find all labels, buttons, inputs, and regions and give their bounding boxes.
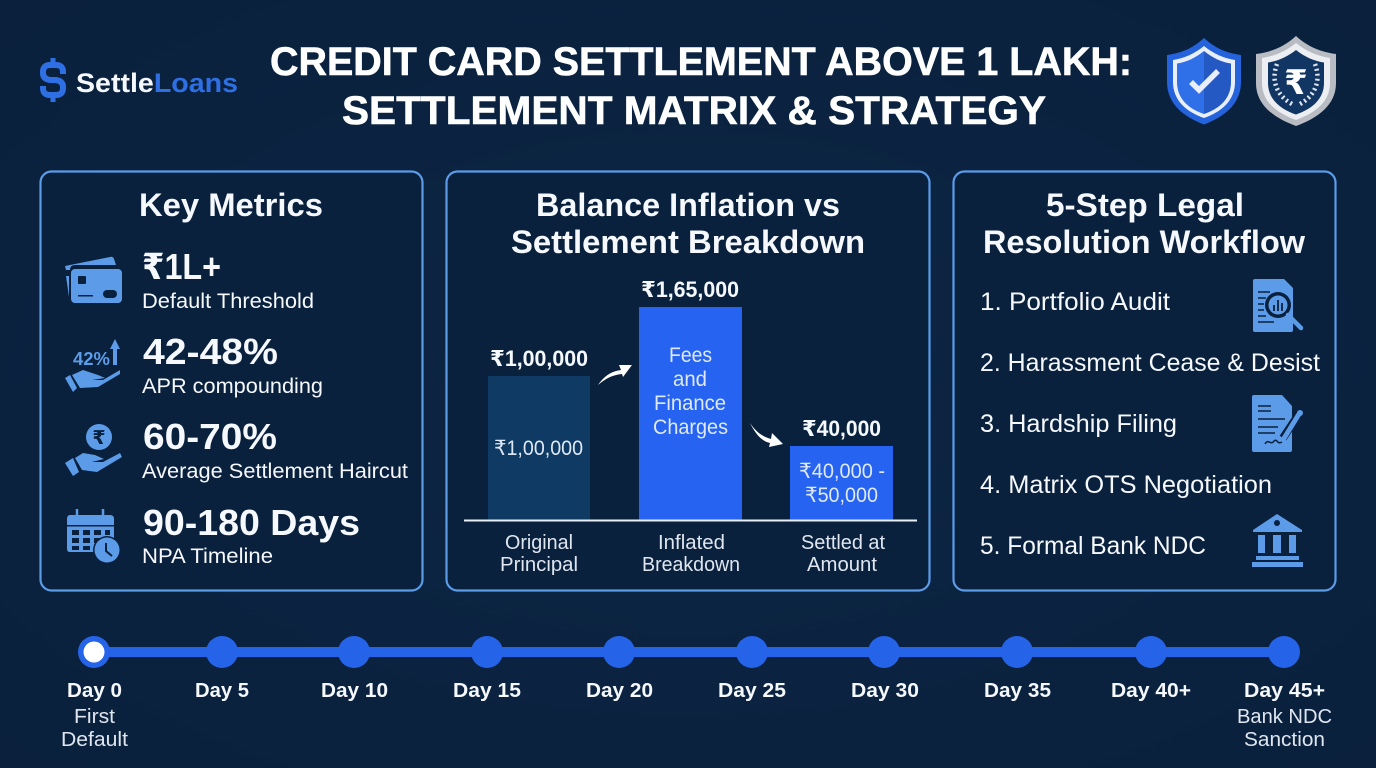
bar: settled amount: ₹40,000 - xyxy=(799,460,885,483)
bar: original principal: ₹1,00,000 xyxy=(494,437,583,460)
title: SETTLEMENT MATRIX & STRATEGY xyxy=(342,89,1046,133)
timeline labels: Default xyxy=(61,729,128,751)
timeline labels: First xyxy=(74,706,115,728)
heading: key metrics: Key Metrics xyxy=(139,187,323,223)
metric: APR compounding: APR compounding xyxy=(142,375,323,398)
bar: settled amount: ₹50,000 xyxy=(805,484,878,507)
title: CREDIT CARD SETTLEMENT ABOVE 1 LAKH: xyxy=(270,40,1132,84)
timeline labels: Day 25 xyxy=(718,680,786,702)
metric: default threshold: ₹1L+ xyxy=(142,246,221,287)
axis labels: Original xyxy=(505,532,573,554)
timeline labels: Day 15 xyxy=(453,680,521,702)
panel: balance inflation chart xyxy=(446,172,930,590)
metric: default threshold: Default Threshold xyxy=(142,290,314,313)
icon: document audit xyxy=(1253,279,1301,332)
icon: rupee shield: ₹ xyxy=(1284,64,1308,102)
steps list: 3. Hardship Filing xyxy=(980,410,1177,438)
bar: inflated breakdown: Finance xyxy=(654,392,726,415)
timeline labels: Day 30 xyxy=(851,680,919,702)
timeline labels: Day 20 xyxy=(586,680,653,702)
arrow: principal to inflated xyxy=(598,365,632,385)
icon: calendar and clock xyxy=(67,509,121,564)
timeline markers xyxy=(78,636,1300,668)
metric: default threshold xyxy=(142,246,314,313)
bar: inflated breakdown: Fees xyxy=(669,344,712,367)
icon: 42 percent on hand xyxy=(65,339,120,392)
icon: rupee shield xyxy=(1256,36,1336,126)
axis labels xyxy=(500,532,885,576)
axis labels: Principal xyxy=(500,554,578,576)
icon: rupee coin on hand xyxy=(65,424,122,476)
heading: workflow: 5-Step Legal xyxy=(1046,187,1244,223)
steps list: 1. Portfolio Audit xyxy=(980,288,1170,316)
timeline labels: Day 10 xyxy=(321,680,388,702)
metric: APR compounding: 42-48% xyxy=(143,331,278,372)
timeline labels: Bank NDC xyxy=(1237,706,1332,728)
timeline labels: Day 5 xyxy=(195,680,249,702)
axis labels: Amount xyxy=(807,554,877,576)
icon: 42 percent on hand: 42% xyxy=(73,349,110,369)
bar: settled amount xyxy=(790,416,893,520)
bar: inflated breakdown: and xyxy=(673,368,707,391)
panel: key metrics xyxy=(40,172,422,590)
heading: workflow: Resolution Workflow xyxy=(983,224,1305,260)
icon: dollar sign xyxy=(43,58,63,102)
heading: balance inflation: Settlement Breakdown xyxy=(511,224,865,260)
icon: blue check shield xyxy=(1167,38,1241,124)
icon: credit cards xyxy=(65,257,122,303)
bar: inflated breakdown: ₹1,65,000 xyxy=(641,277,739,302)
timeline labels: Day 35 xyxy=(984,680,1051,702)
metric: settlement haircut xyxy=(142,416,408,483)
steps list xyxy=(980,288,1320,560)
wordmark: SettleLoans xyxy=(76,68,238,98)
bar: original principal xyxy=(488,346,590,520)
timeline labels: Day 45+ xyxy=(1244,680,1325,702)
metric: settlement haircut: Average Settlement Haircut xyxy=(142,460,408,483)
heading: balance inflation: Balance Inflation vs xyxy=(536,187,840,223)
arrow: inflated to settled xyxy=(750,423,783,447)
bar: settled amount: ₹40,000 xyxy=(802,416,881,441)
icon: rupee coin on hand: ₹ xyxy=(92,428,106,449)
bar: inflated breakdown xyxy=(639,277,742,520)
metric: NPA timeline: NPA Timeline xyxy=(142,545,273,568)
timeline labels: Sanction xyxy=(1244,729,1325,751)
panel: legal workflow xyxy=(954,172,1336,590)
axis labels: Settled at xyxy=(801,532,885,554)
timeline xyxy=(61,636,1332,751)
timeline labels: Day 0 xyxy=(67,680,122,702)
axis labels: Breakdown xyxy=(642,554,740,576)
bar: original principal: ₹1,00,000 xyxy=(490,346,588,371)
icon: bank building xyxy=(1252,514,1303,567)
steps list: 4. Matrix OTS Negotiation xyxy=(980,471,1272,499)
metric: NPA timeline xyxy=(142,502,360,568)
heading: balance inflation xyxy=(511,187,865,260)
title xyxy=(270,40,1132,133)
timeline labels xyxy=(61,680,1332,751)
logo: SettleLoans xyxy=(43,58,238,102)
metric: settlement haircut: 60-70% xyxy=(143,416,277,457)
steps list: 2. Harassment Cease & Desist xyxy=(980,349,1320,377)
heading: workflow xyxy=(983,187,1305,260)
metric: NPA timeline: 90-180 Days xyxy=(143,502,360,543)
metric: APR compounding xyxy=(142,331,323,398)
timeline labels: Day 40+ xyxy=(1111,680,1191,702)
steps list: 5. Formal Bank NDC xyxy=(980,532,1206,560)
bar: inflated breakdown: Charges xyxy=(653,416,728,439)
axis labels: Inflated xyxy=(658,532,725,554)
icon: document signature xyxy=(1252,395,1303,452)
